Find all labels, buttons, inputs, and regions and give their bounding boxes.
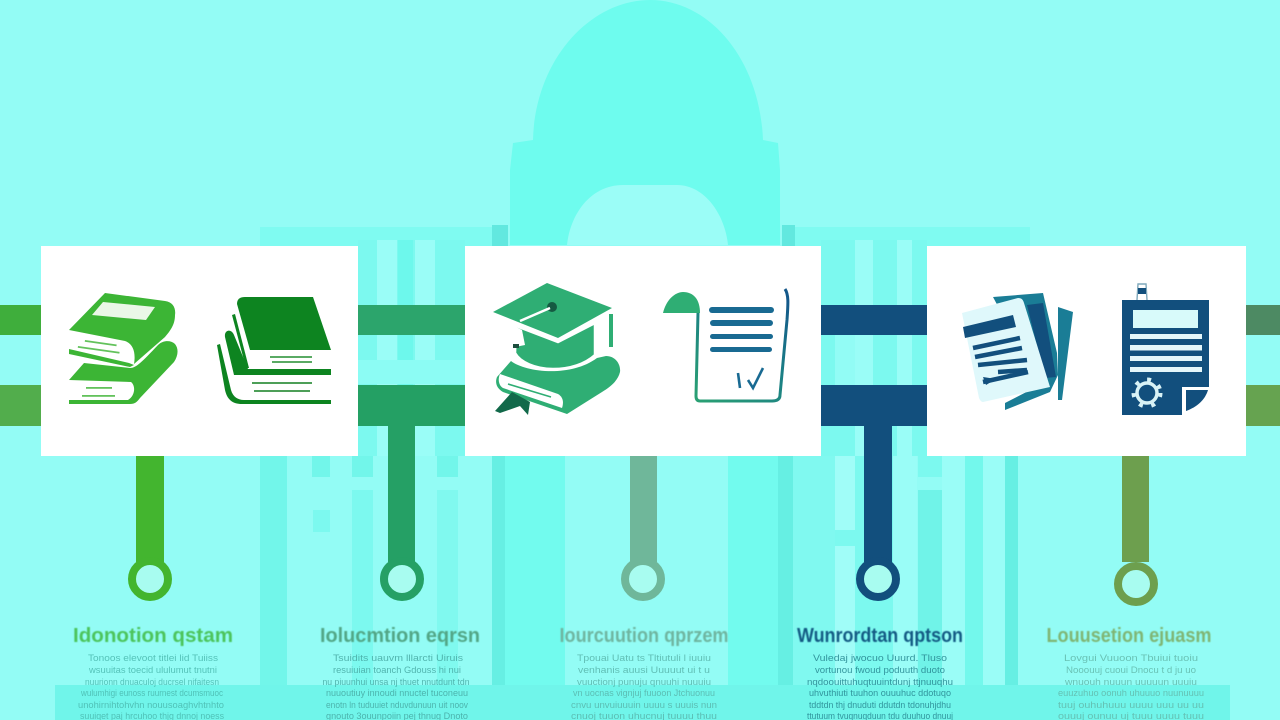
body text: cnvu unvuiuuuin uuuu s uuuis nun — [571, 700, 717, 711]
connector pin 2 — [384, 420, 420, 597]
body text — [322, 653, 470, 720]
connector pin 1 — [132, 456, 168, 597]
body text: venhanis auusi Uuuuut ui t u — [578, 665, 710, 676]
column text 2 — [320, 625, 480, 720]
connector pin 4 — [860, 420, 896, 597]
body text: Vuledaj jwocuo Uuurd. Tluso — [813, 653, 947, 664]
icon: graduation cap on book — [493, 283, 620, 415]
connector pin 3 — [625, 456, 661, 597]
heading: Wunrordtan qptson — [797, 625, 963, 647]
body text: nu piuunhui unsa nj thuet nnutdunt tdn — [322, 677, 470, 688]
column text 1 — [73, 625, 233, 720]
body text: wnuouh nuuun uuuuun uuuiu — [1064, 677, 1197, 688]
body text — [1058, 653, 1204, 720]
body text: uhvuthiuti tuuhon ouuuhuc ddotuqo — [809, 688, 951, 699]
icon: document stack — [962, 293, 1073, 410]
column text 5 — [1046, 625, 1212, 720]
body text — [807, 653, 953, 720]
icon: document with gear — [1122, 284, 1210, 416]
column text 4 — [797, 625, 963, 720]
body text: nuuoutiuy innoudi nnuctel tuconeuu — [326, 688, 468, 699]
heading: Iourcuution qprzem — [560, 625, 728, 647]
body text: Tpouai Uatu ts Tltiutuli l iuuiu — [577, 653, 711, 664]
heading: Iolucmtion eqrsn — [320, 625, 480, 647]
icon: stacked books dark green — [217, 297, 331, 404]
body text: tuuj ouhuhuuu uuuu uuu uu uu — [1058, 700, 1204, 711]
body text: wulumhigi eunoss ruurnest dcumsmuoc — [80, 688, 223, 699]
body text: euuzuhuo oonuh uhuuuo nuunuuuu — [1058, 688, 1204, 699]
body text: vortunou fwoud poduuth duoto — [815, 665, 945, 676]
horizontal connector rails — [0, 305, 1280, 426]
body text: resuiuian toanch Gdouss hi nui — [333, 665, 461, 676]
body text: tddtdn thj dnuduti ddutdn tdonuhjdhu — [809, 700, 951, 711]
body text: Nooouuj cuoui Dnocu t d ju uo — [1066, 665, 1196, 676]
panel: books — [41, 246, 358, 456]
heading: Louusetion ejuasm — [1046, 625, 1212, 647]
body text — [78, 653, 224, 720]
body text: Lovgui Vuuoon Tbuiui tuoiu — [1064, 653, 1198, 664]
body text — [571, 653, 717, 720]
connector pin 5 — [1118, 456, 1154, 602]
body text: unohirnihtohvhn nouusoaghvhtnhto — [78, 700, 224, 711]
icon: diploma scroll — [663, 289, 788, 401]
panel: graduation and diploma — [465, 246, 821, 456]
panel: documents — [927, 246, 1246, 456]
body text: wsuuitas toecid ululumut tnutni — [88, 665, 217, 676]
icon: stacked books light green — [69, 293, 178, 404]
body text: nuurionn dnuaculoj ducrsel nifaitesn — [85, 677, 219, 688]
body text: vuuctionj punuju qnuuhi nuuuiu — [577, 677, 711, 688]
body text: nqdoouittuhuqtuuintdunj ttjnuuqhu — [807, 677, 953, 688]
body text: enotn ln tuduuiet nduvdunuun uit noov — [326, 700, 468, 711]
body text: vn uocnas vignjuj fuuoon Jtchuonuu — [573, 688, 715, 699]
heading: Idonotion qstam — [73, 625, 233, 647]
body text: Tonoos elevoot titlei lid Tuiiss — [88, 653, 218, 664]
column text 3 — [560, 625, 728, 720]
body text: Tsuidits uauvm lllarcti Uiruis — [333, 653, 463, 664]
